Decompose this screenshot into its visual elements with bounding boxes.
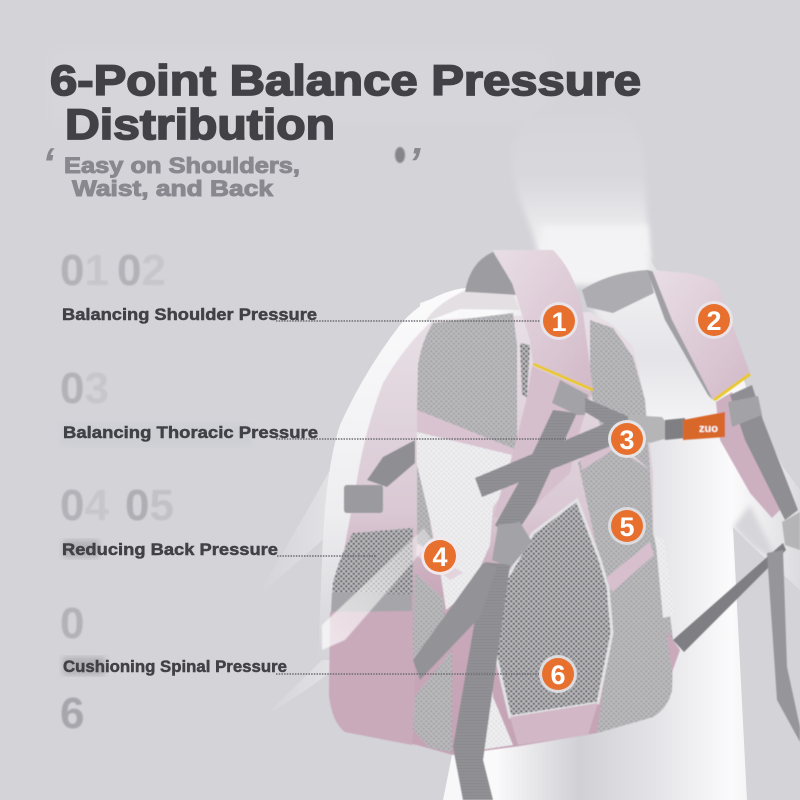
white light beam <box>322 528 432 650</box>
label: spinal pressure: Cushioning Spinal Pressure <box>63 657 287 676</box>
smudge under back label <box>63 540 99 558</box>
quote marks: ‘ <box>42 139 55 188</box>
quote marks: ’ <box>408 139 421 188</box>
lower left pink pocket <box>329 612 415 745</box>
left upper arm <box>318 288 463 660</box>
neck highlight <box>542 225 650 285</box>
chest webbing B <box>475 418 626 497</box>
number 6: 6 <box>60 689 84 738</box>
marker 5: 5 <box>619 512 635 542</box>
dark mesh slit <box>520 343 530 397</box>
pocket hem band <box>331 593 412 612</box>
diagonal strap <box>413 563 497 680</box>
marker 4 <box>421 537 459 575</box>
title: Distribution <box>65 101 335 149</box>
pink strap column <box>493 366 592 520</box>
outer arm glow <box>257 433 350 714</box>
pink yoke <box>417 410 530 475</box>
lower left grey mesh <box>412 573 445 660</box>
number group 01 02: 0102 <box>60 246 166 295</box>
subtitle: Easy on Shoulders, <box>64 153 300 178</box>
marker 1 <box>540 302 578 340</box>
white mesh lumbar panel <box>417 432 515 610</box>
leader lines <box>276 321 566 674</box>
right loose strap <box>767 550 800 742</box>
upper back mesh panel left <box>417 313 517 450</box>
marker 6: 6 <box>550 660 566 690</box>
number group 04 05: 04 05 <box>60 481 174 530</box>
right loose diagonal strap <box>673 543 786 652</box>
marker 1: 1 <box>551 307 567 337</box>
strap 2 pink pad <box>652 270 750 400</box>
top buckle <box>552 380 588 415</box>
title: 6-Point Balance Pressure <box>50 57 641 105</box>
strap 2 lower pink <box>716 392 780 518</box>
side mesh right <box>655 535 675 618</box>
yellow trim 1 <box>533 364 593 390</box>
grey edge strap 2 <box>647 270 713 400</box>
torso <box>420 250 800 800</box>
side buckle <box>344 485 383 513</box>
subtitle: Waist, and Back <box>72 176 274 201</box>
marker 4: 4 <box>432 542 448 572</box>
chest webbing A <box>585 398 632 428</box>
upper back mesh panel right <box>590 320 650 470</box>
quote marks <box>42 139 421 188</box>
faint title backdrop <box>50 48 550 123</box>
head and neck <box>512 98 650 260</box>
marker 3: 3 <box>619 425 635 455</box>
orange brand tag: zuo <box>699 423 718 435</box>
lower centre mesh <box>493 500 612 717</box>
backpack <box>329 250 800 800</box>
label: back pressure: Reducing Back Pressure <box>62 540 278 559</box>
grey side mesh <box>417 465 435 560</box>
right buckle <box>728 396 762 427</box>
strap 1 grey edge <box>465 252 518 295</box>
label: thoracic pressure: Balancing Thoracic Pressure <box>63 423 318 442</box>
yellow trim 2 <box>714 374 750 400</box>
right arm shadow <box>733 505 780 565</box>
lower left light mesh <box>475 590 513 750</box>
label: shoulder pressure: Balancing Shoulder Pressure <box>62 305 317 324</box>
mannequin figure <box>257 98 800 800</box>
strap 1 pink pad <box>493 250 593 390</box>
right mesh <box>578 445 673 733</box>
left side strap <box>367 440 415 487</box>
strap 1 lower webbing <box>495 410 577 540</box>
lower webbing down <box>453 562 510 800</box>
lower strap 1 buckle <box>492 522 532 568</box>
right end pink edge <box>666 630 680 672</box>
marker 5 <box>608 507 646 545</box>
number 0: 0 <box>60 599 84 648</box>
upper chest shading <box>590 285 740 430</box>
marker 2: 2 <box>706 306 722 336</box>
number 03: 03 <box>60 364 109 413</box>
strap 2 lower webbing <box>730 385 798 520</box>
marker 2 <box>695 301 733 339</box>
side pocket mesh <box>332 528 413 595</box>
title <box>50 57 641 149</box>
orange brand tag <box>683 412 725 440</box>
top grab band <box>425 287 520 322</box>
bottom pink panel <box>510 703 598 745</box>
marker 6 <box>539 655 577 693</box>
main body <box>329 312 673 755</box>
pink strip under marker 4 <box>416 543 463 580</box>
smudge under spinal label <box>63 657 105 675</box>
chest buckle <box>628 415 668 443</box>
pink diagonal <box>606 542 654 592</box>
chest strap grey <box>665 418 685 440</box>
marker 3 <box>608 420 646 458</box>
pink strip below chest strap <box>580 442 616 470</box>
smudge under thoracic label <box>62 424 252 446</box>
right end buckle <box>782 512 800 550</box>
subtitle <box>64 153 300 201</box>
far strap: grey shoulder pad <box>582 270 654 313</box>
